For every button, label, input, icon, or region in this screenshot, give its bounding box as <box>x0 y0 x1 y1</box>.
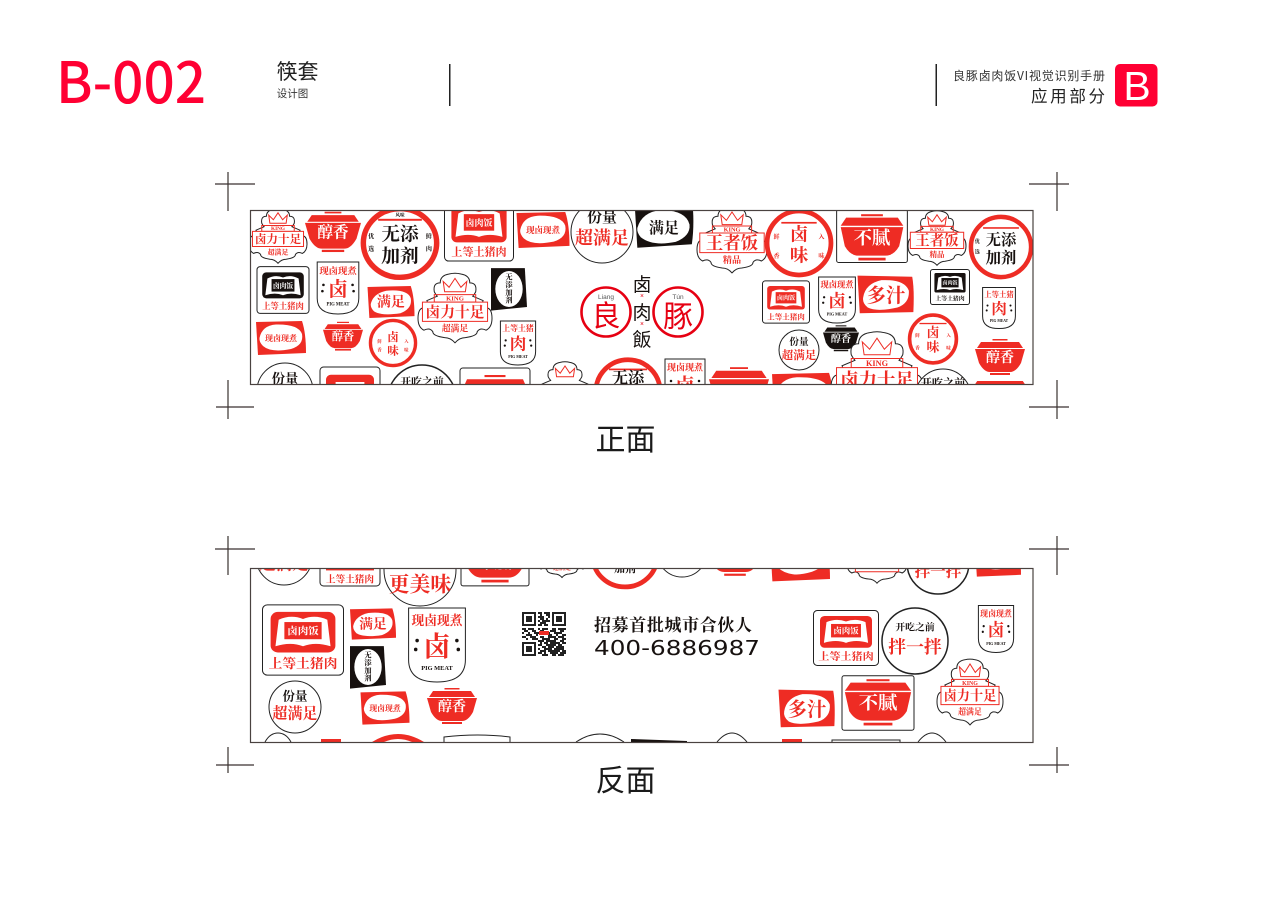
badge: ring 卤味 large: 鲜 <box>773 233 780 241</box>
badge: king 卤力十足: 超满足 <box>268 248 288 257</box>
badge: black tall blob: 加 <box>364 666 372 675</box>
badge: circle cropped: 超满足 <box>261 388 309 407</box>
badge: bowl box cropped <box>460 368 530 384</box>
badge: black tall blob <box>491 268 527 311</box>
badge: blob 多汁: 多汁 <box>788 699 826 721</box>
badge: circle 拌一拌: 拌一拌 <box>888 637 942 657</box>
badge: circle 超满足 small <box>779 330 819 370</box>
badge: blob cropped top right <box>975 545 1021 577</box>
badge: shield big: PIG MEAT <box>421 665 453 672</box>
logo: 豚 seal <box>654 288 702 336</box>
badge: ring 卤味: 入 <box>404 339 409 344</box>
badge: circle 超满足: 超满足 <box>272 704 318 722</box>
badge: ring 无添加剂: 风味 <box>395 211 405 218</box>
badge: ring 卤味: 味 <box>404 347 409 354</box>
bottom cropped tops <box>265 733 946 742</box>
badge: shield far right: 上等土猪 <box>984 290 1014 299</box>
badge: ring 无添加剂: 无添 <box>381 225 420 246</box>
badge: blob 满足: 满足 <box>359 616 387 632</box>
badge: book right: 上等土猪肉 <box>818 650 874 663</box>
badge: book cropped top: 上等土猪肉 <box>326 573 374 585</box>
badge: ring 卤味: 卤 <box>387 330 399 344</box>
badge: shield cropped <box>665 359 705 409</box>
logo: vertical name 卤肉飯: × <box>640 320 644 328</box>
badge: circle cropped right <box>915 369 971 425</box>
badge: red blob 多汁: 多汁 <box>867 285 905 307</box>
badge: black book: 卤肉饭 <box>273 281 293 290</box>
badge: king large cropped <box>831 332 923 418</box>
badge: red blob cropped <box>772 373 834 415</box>
badge: king cropped top right <box>847 527 907 583</box>
badge: king 卤力十足 large <box>418 273 492 343</box>
badge: circle 超满足 <box>269 681 321 733</box>
badge: red blob 多汁 <box>858 276 914 313</box>
badge: black tall blob: 无 <box>505 273 513 282</box>
badge: circle 更美味 <box>384 534 456 606</box>
badge: ring cropped top: 加剂 <box>614 561 636 575</box>
badge: blob 满足 <box>350 608 396 640</box>
badge: black tall blob: 无 <box>364 651 372 660</box>
logo: 良 seal <box>582 288 630 336</box>
badge: ring 卤味 small: 味 <box>926 339 940 354</box>
badge: blob 现卤现煮 <box>360 691 410 725</box>
badge: red blob 满足 <box>368 286 414 318</box>
badge: king cropped top: 超满足 <box>553 564 571 572</box>
badge: shield far right: PIG MEAT <box>990 319 1009 323</box>
badge: bowl right <box>975 339 1025 375</box>
badge: king right: 卤力十足 <box>944 687 997 703</box>
badge: small bowl <box>323 322 363 351</box>
badge: king 王者饭 right: KING <box>930 227 944 233</box>
badge: bowl 醇香 <box>305 212 361 252</box>
badge: ring 无添加剂: 优 <box>368 232 375 240</box>
badge: king 卤力十足 large: 超满足 <box>442 323 468 334</box>
badge: bowl right: 醇香 <box>986 349 1014 366</box>
header: title: 设计图 <box>277 87 308 100</box>
badge: bowl: 醇香 <box>438 698 466 715</box>
badge: book 上等土猪肉: 卤肉饭 <box>466 217 492 228</box>
badge: ring 卤味: 香 <box>377 347 382 354</box>
badge: black book: 上等土猪肉 <box>262 301 304 311</box>
badge: blob 多汁 <box>778 690 835 727</box>
badge: black blob 满足: 满足 <box>649 219 679 237</box>
badge: ring 卤味 large: 入 <box>818 234 825 241</box>
badge: king 卤力十足 <box>249 209 307 263</box>
panel: front sleeve <box>250 210 1034 386</box>
badge: bowl 不腻 box: 不腻 <box>859 693 898 714</box>
badge: black book right <box>930 269 970 305</box>
header: title <box>276 61 318 100</box>
badge: bowl box cropped top: 不腻 <box>479 553 512 572</box>
badge: ring 卤味 small: 卤 <box>926 325 940 340</box>
badge: book big: 上等土猪肉 <box>269 655 337 671</box>
badge: circle cropped right: 开吃之前 <box>921 376 965 390</box>
badge: king 卤力十足 large: 卤力十足 <box>425 303 485 321</box>
badge: shield big: 卤 <box>424 631 450 662</box>
header: manual name: 应用部分 <box>1031 83 1105 107</box>
badge: king 王者饭: KING <box>724 227 740 234</box>
badge: red bowl cropped right <box>972 381 1028 388</box>
badge: book cropped <box>320 366 380 384</box>
badge: black book right: 上等土猪肉 <box>935 294 965 302</box>
badge: blob cropped top center <box>770 541 830 581</box>
header: B badge: B <box>1123 63 1151 109</box>
badge: king right: 超满足 <box>958 706 982 716</box>
badge: ring 无添加剂 <box>363 209 437 277</box>
badge: king 王者饭: 王者饭 <box>706 233 759 253</box>
crop marks: front <box>215 172 1069 419</box>
badge: shield 现卤现煮 <box>317 262 359 314</box>
label: 反面: 反面 <box>596 756 656 800</box>
badge: bowl cropped top center <box>710 549 760 576</box>
badge: book right <box>762 281 810 323</box>
badge: ring 卤味 large: 味 <box>818 252 825 260</box>
badge: king 卤力十足 large: KING <box>446 296 464 303</box>
badge: ring 卤味 small <box>910 315 956 363</box>
badge: ring cropped top <box>593 527 657 587</box>
badge: circle 拌一拌: 开吃之前 <box>895 620 935 633</box>
badge: book right: 卤肉饭 <box>833 626 859 636</box>
badge: king large cropped: KING <box>866 359 889 368</box>
badge: ring 无添加剂: 选 <box>368 245 375 253</box>
badge: ring 无添加剂 right <box>971 217 1031 277</box>
back strip outline <box>250 568 1033 742</box>
badge: shield small right <box>978 606 1014 652</box>
badge: shield small right: PIG MEAT <box>986 641 1006 646</box>
header: manual name <box>953 67 1105 107</box>
badge: circle 超满足: 份量 <box>587 208 617 226</box>
header: right divider <box>936 64 937 106</box>
header: section code: B-002 <box>56 38 206 120</box>
badge: ring 无添加剂: 肉 <box>426 245 432 253</box>
badge: shield right: 现卤现煮 <box>820 280 854 290</box>
logo: vertical name 卤肉飯: × <box>640 292 644 300</box>
badge: circle 拌一拌 cropped <box>907 532 969 594</box>
badge: black blob 满足 <box>635 209 693 248</box>
badge: ring 无添加剂 right: 优 <box>975 238 980 245</box>
badge: black tall blob: 添 <box>505 280 513 289</box>
badge: black book right: 卤肉饭 <box>942 280 958 287</box>
badge: black book <box>257 267 309 313</box>
badge: king 王者饭 right <box>908 211 966 265</box>
badge: ring 卤味 large: 味 <box>790 245 809 265</box>
badge: book right: 上等土猪肉 <box>767 311 805 321</box>
badge: circle 超满足 small: 份量 <box>789 336 809 348</box>
front strip outline <box>250 210 1033 384</box>
badge: small bowl: 醇香 <box>332 329 354 343</box>
logo: vertical name 卤肉飯: 肉 <box>632 298 652 325</box>
badge: circle cropped top center <box>657 527 707 577</box>
badge: small shield: 肉 <box>510 335 526 354</box>
badge: book big <box>262 605 344 675</box>
badge: ring cropped: 无添 <box>612 369 646 388</box>
badge: small shield <box>500 321 536 365</box>
badge: black bowl <box>823 325 859 351</box>
recruitment text: 招募首批城市合伙人 <box>594 615 752 635</box>
front sticker pattern <box>251 211 1032 384</box>
badge: shield big <box>409 608 465 682</box>
badge: circle 超满足: 超满足 <box>575 227 629 248</box>
badge: bowl box cropped top <box>461 533 529 586</box>
badge: book cropped top <box>320 541 380 586</box>
logo: vertical name 卤肉飯 <box>633 275 651 348</box>
badge: circle 拌一拌 <box>882 608 948 674</box>
badge: ring 无添加剂: 鲜 <box>426 232 433 240</box>
badge: ring 无添加剂: 加剂 <box>381 247 419 268</box>
badge: shield far right: 肉 <box>991 300 1007 318</box>
badge: ring 卤味 small: 味 <box>946 344 951 351</box>
badge: bowl 不腻 in box: 不腻 <box>854 228 891 248</box>
header: B badge <box>1115 63 1158 109</box>
logo: 豚 seal: Tún <box>672 294 684 301</box>
header: left divider <box>449 64 450 106</box>
badge: ring 卤味 small: 香 <box>915 344 920 351</box>
badge: king 卤力十足: 卤力十足 <box>255 232 302 246</box>
badge: black tall blob: 剂 <box>364 673 372 682</box>
badge: book big: 卤肉饭 <box>287 625 319 637</box>
badge: shield cropped: 卤 <box>675 374 695 396</box>
badge: black tall blob <box>350 646 386 689</box>
logo: 良 seal: 良 <box>591 293 621 335</box>
header: manual name: 良豚卤肉饭VI视觉识别手册 <box>953 67 1105 84</box>
badge: shield 现卤现煮: 现卤现煮 <box>319 265 357 277</box>
badge: red blob: 现卤现煮 <box>265 333 298 343</box>
badge: red blob <box>256 321 306 355</box>
badge: circle 开吃之前 cropped <box>390 364 454 384</box>
badge: blob 现卤现煮: 现卤现煮 <box>369 703 402 713</box>
badge: book 上等土猪肉: 上等土猪肉 <box>451 245 507 259</box>
recruitment text: 400-6886987 <box>594 636 760 660</box>
badge: circle 超满足 <box>570 211 634 264</box>
badge: shield small right: 现卤现煮 <box>980 608 1013 618</box>
badge: circle cropped <box>257 362 313 384</box>
badge: red blob 现卤现煮: 现卤现煮 <box>526 225 560 235</box>
badge: circle 拌一拌 cropped: 拌一拌 <box>915 562 962 581</box>
badge: book right <box>814 611 878 665</box>
logo: 豚 seal: 豚 <box>663 292 693 336</box>
badge: small shield: PIG MEAT <box>508 354 528 359</box>
badge: circle 超满足 small: 超满足 <box>782 348 817 362</box>
badge: circle cropped top: 超满足 <box>260 554 308 573</box>
QR code <box>522 612 566 656</box>
badge: black tall blob: 加 <box>505 288 513 297</box>
badge: book right: 卤肉饭 <box>777 294 795 302</box>
badge: shield right: 卤 <box>828 291 846 311</box>
badge: shield far right <box>983 288 1015 328</box>
badge: circle 超满足: 份量 <box>283 688 308 703</box>
crop marks: back <box>215 536 1069 773</box>
panel: back sleeve <box>250 527 1033 742</box>
badge: circle 更美味: 更美味 <box>389 573 451 597</box>
badge: shield right <box>819 277 855 323</box>
badge: red blob 现卤现煮 <box>516 212 570 248</box>
badge: bowl 不腻 in box <box>837 209 907 262</box>
badge: bowl <box>427 688 477 724</box>
badge: shield big: 现卤现煮 <box>411 613 463 628</box>
badge: shield 现卤现煮: 卤 <box>328 279 348 301</box>
badge: king cropped <box>542 361 588 384</box>
badge: ring 卤味 small: 鲜 <box>915 332 920 339</box>
badge: king 王者饭: 精品 <box>723 254 741 265</box>
badge: small shield: 上等土猪 <box>502 323 534 333</box>
badge: book 上等土猪肉 <box>444 211 514 262</box>
badge: shield cropped: 现卤现煮 <box>667 362 704 372</box>
badge: king 王者饭 <box>697 207 767 273</box>
badge: king right <box>937 659 1003 725</box>
badge: shield small right: 卤 <box>988 620 1004 640</box>
logo: 良 seal: Liang <box>598 294 614 301</box>
badge: ring 卤味: 鲜 <box>377 338 382 345</box>
badge: shield 现卤现煮: PIG MEAT <box>326 303 350 308</box>
badge: circle 开吃之前 cropped: 开吃之前 <box>400 374 444 388</box>
back sticker pattern <box>256 527 1021 742</box>
badge: ring 卤味 large: 香 <box>773 252 780 260</box>
badge: bowl 不腻 box <box>842 676 914 730</box>
label: 正面: 正面 <box>596 415 656 459</box>
badge: king right: KING <box>962 681 978 687</box>
logo: vertical name 卤肉飯: 飯 <box>632 325 652 352</box>
badge: ring 卤味 <box>370 320 416 366</box>
badge: ring 无添加剂 right: 选 <box>975 248 980 255</box>
badge: king 王者饭 right: 精品 <box>929 249 945 259</box>
badge: ring 卤味 large <box>767 211 831 275</box>
badge: ring cropped <box>594 357 662 384</box>
badge: ring 无添加剂 right: 加剂 <box>986 249 1016 267</box>
badge: shield right: PIG MEAT <box>827 312 847 317</box>
badge: ring 无添加剂 right: 无添 <box>986 231 1018 249</box>
badge: ring 卤味 small: 入 <box>946 333 951 339</box>
badge: black tall blob: 剂 <box>505 295 513 304</box>
badge: ring 卤味 large: 卤 <box>790 224 808 244</box>
badge: king cropped top <box>537 530 587 578</box>
header: title: 筷套 <box>276 61 318 84</box>
recruitment text <box>594 615 760 660</box>
logo: vertical name 卤肉飯: 卤 <box>632 270 652 297</box>
badge: circle cropped top <box>256 529 312 585</box>
badge: black tall blob: 添 <box>364 658 372 667</box>
badge: bowl cropped <box>709 367 769 407</box>
badge: king 卤力十足: KING <box>271 226 285 232</box>
badge: black bowl: 醇香 <box>831 332 851 345</box>
badge: king 王者饭 right: 王者饭 <box>915 232 959 250</box>
badge: ring 卤味: 味 <box>387 344 399 358</box>
badge: circle cropped: 份量 <box>272 371 298 387</box>
badge: red blob 满足: 满足 <box>377 294 405 311</box>
badge: king large cropped: 卤力十足 <box>840 370 914 390</box>
badge: bowl 醇香: 醇香 <box>317 222 349 241</box>
